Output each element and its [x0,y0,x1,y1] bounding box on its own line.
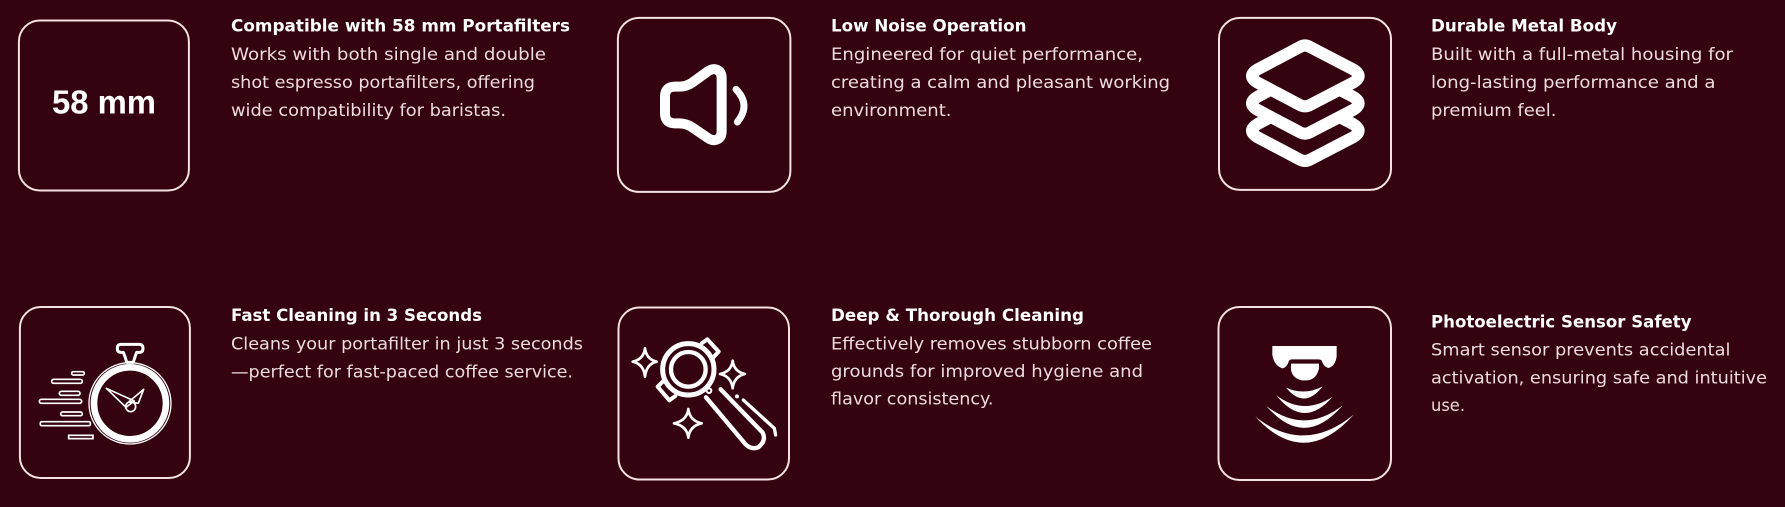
heading: fast cleaning: Fast Cleaning in 3 Seconds [231,306,482,325]
icon box: 58 mm: 58 mm [52,84,156,120]
text: metal body description: Built with a full-metal housing for [1431,45,1733,65]
heading: sensor safety: Photoelectric Sensor Safety [1431,313,1692,332]
text: sensor safety description [1431,341,1767,416]
icon box: 58 mm [19,20,189,190]
text: deep cleaning description [831,334,1152,410]
text: deep cleaning description: Effectively removes stubborn coffee [831,334,1152,354]
panel: fast cleaning [20,306,583,478]
text: low noise description: environment. [831,101,952,121]
text: low noise description: Engineered for quiet performance, [831,45,1143,65]
panel: low noise [618,16,1170,192]
text: fast cleaning description: —perfect for fast-paced coffee service. [231,362,573,382]
icon: sensor waves in box [1218,307,1391,480]
text: sensor safety description: Smart sensor prevents accidental [1431,341,1730,361]
icon: portafilter with sparkles in box [618,308,789,480]
text: fast cleaning description: Cleans your portafilter in just 3 seconds [231,334,583,354]
text: deep cleaning description: flavor consistency. [831,390,994,410]
heading: metal body: Durable Metal Body [1431,16,1617,36]
text: compatible description [231,45,546,121]
panel: sensor safety [1218,307,1767,480]
icon: layers in box [1219,18,1391,190]
text: fast cleaning description [231,334,583,382]
text: low noise description: creating a calm and pleasant working [831,73,1170,93]
heading: deep cleaning: Deep & Thorough Cleaning [831,306,1084,325]
heading: low noise: Low Noise Operation [831,16,1026,36]
text: compatible description: Works with both single and double [231,45,546,65]
text: metal body description: premium feel. [1431,101,1556,121]
panel: metal body [1219,16,1733,190]
text: metal body description [1431,45,1733,121]
icon: stopwatch in box [20,307,190,478]
panel: 58 mm compatibility [19,16,570,190]
text: compatible description: shot espresso portafilters, offering [231,73,535,93]
panel: deep cleaning [618,306,1152,480]
heading: compatible: Compatible with 58 mm Portafilters [231,16,570,36]
icon: speaker in box [618,18,790,192]
text: deep cleaning description: grounds for improved hygiene and [831,362,1143,382]
text: sensor safety description: activation, ensuring safe and intuitive [1431,369,1767,389]
text: low noise description [831,45,1170,121]
text: compatible description: wide compatibility for baristas. [231,101,506,121]
text: sensor safety description: use. [1431,396,1465,416]
text: metal body description: long-lasting performance and a [1431,73,1716,93]
